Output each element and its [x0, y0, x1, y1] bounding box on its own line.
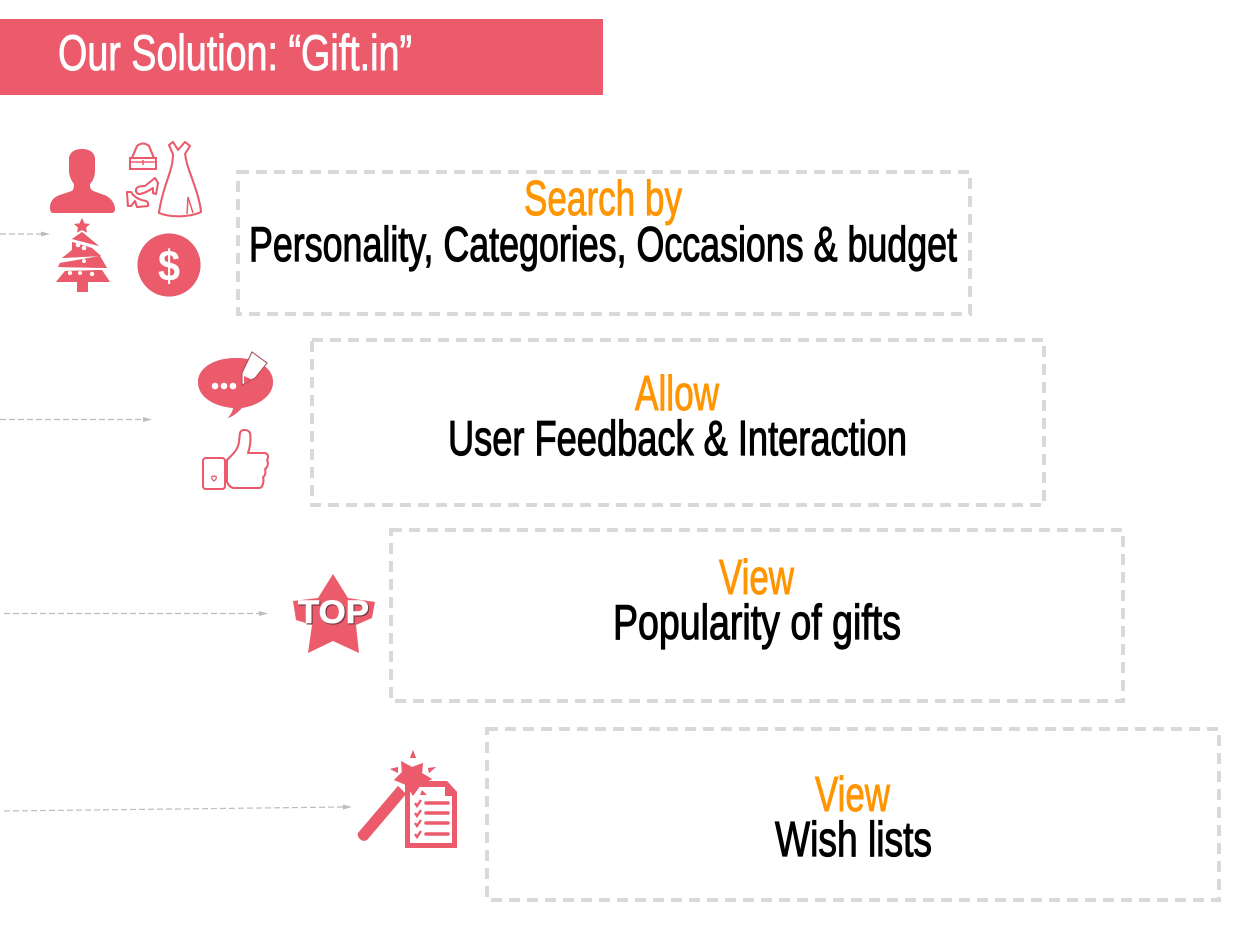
icon: top star: TOP: [298, 594, 369, 630]
arrow: to search icons: [0, 232, 50, 236]
panel: search by: Search by: [524, 172, 682, 226]
icon: high heel shoes: [127, 178, 158, 207]
panel: search by: [238, 172, 970, 314]
icon: person: [50, 149, 115, 213]
icon: top star: [293, 574, 375, 653]
panel: view wish lists: [487, 729, 1219, 900]
panel: view popularity: [391, 530, 1123, 701]
icon: handbag: [130, 144, 156, 169]
panel: allow feedback: [312, 340, 1044, 505]
panel: allow feedback: Allow: [635, 367, 719, 421]
icon: speech bubble with pencil: [198, 352, 273, 418]
panel: view wish lists: View: [815, 768, 890, 822]
icon: dollar coin: [138, 234, 200, 296]
arrow: to feedback icons: [0, 417, 152, 422]
icon: magic wand and wish list: [358, 750, 457, 848]
panel: view popularity: View: [719, 551, 794, 605]
icon: christmas tree: [56, 218, 110, 292]
arrow: to top icon: [4, 611, 268, 616]
icon: top star: TOP: [299, 595, 370, 631]
icon: dollar coin: $: [158, 242, 180, 291]
icon: thumbs up: [203, 430, 268, 489]
title banner: [0, 19, 603, 95]
panel: allow feedback: User Feedback & Interaction: [448, 412, 907, 466]
panel: view wish lists: Wish lists: [775, 813, 932, 867]
arrow: to wish list icon: [4, 804, 352, 811]
icon: dress: [159, 142, 201, 216]
panel: search by: Personality, Categories, Occasions & budget: [249, 218, 957, 272]
title banner: Our Solution: “Gift.in”: [58, 25, 412, 81]
panel: view popularity: Popularity of gifts: [613, 596, 901, 650]
